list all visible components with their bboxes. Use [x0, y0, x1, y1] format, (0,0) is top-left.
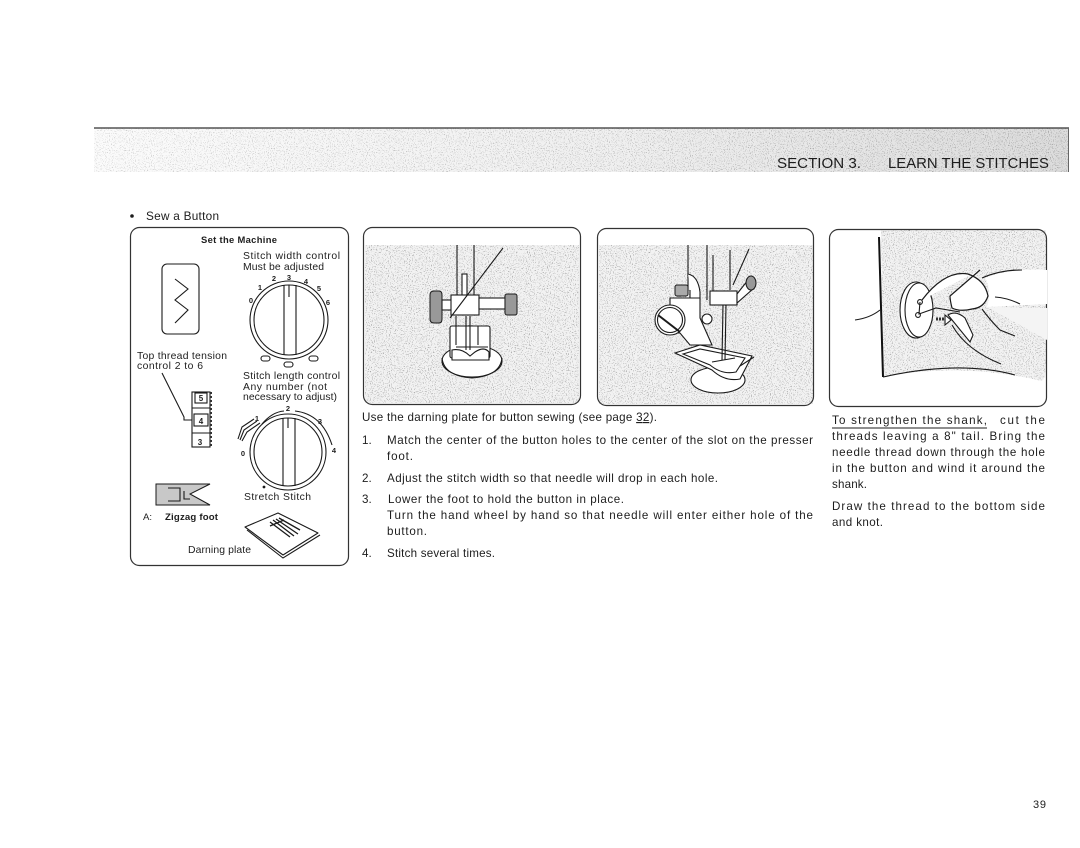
text block: strengthen the shank: To strengthen the shank, — [832, 414, 987, 427]
dial: stitch length — [238, 404, 337, 490]
label: stitch length control: necessary to adjust) — [243, 392, 337, 403]
section title — [777, 155, 1049, 172]
dial: stitch length: 3 — [318, 417, 322, 426]
step 4: Stitch several times. — [387, 547, 495, 560]
label: darning plate: Darning plate — [188, 545, 251, 556]
label: stitch length control: Any number (not — [243, 382, 327, 393]
label: stitch length control: Stitch length control — [243, 371, 340, 382]
page number: 39 — [1033, 799, 1046, 811]
label: zigzag foot — [143, 512, 219, 523]
icon: darning plate — [245, 513, 320, 558]
step 1 — [362, 434, 813, 463]
dial: stitch width: 3 — [287, 273, 291, 282]
step 1: Match the center of the button holes to the center of the slot on the presser — [387, 434, 813, 447]
label: stretch stitch: Stretch Stitch — [244, 492, 311, 503]
icon: zigzag stitch pattern — [162, 264, 199, 334]
panel: set the machine — [130, 228, 348, 566]
step 3: 3. — [362, 493, 372, 506]
step 3 — [362, 493, 813, 538]
label: zigzag foot: A: — [143, 512, 152, 523]
step 1: 1. — [362, 434, 372, 447]
section title: LEARN THE STITCHES — [888, 155, 1049, 172]
step 2: Adjust the stitch width so that needle will drop in each hole. — [387, 472, 718, 485]
dial: stitch width: 4 — [304, 277, 309, 286]
tension control diagram: 4 — [199, 417, 204, 426]
panel heading: Set the Machine — [201, 234, 277, 245]
dial: stitch width: 6 — [326, 298, 330, 307]
text block: strengthen the shank: threads leaving a 8" tail. Bring the — [832, 430, 1045, 443]
step 3: Turn the hand wheel by hand so that needle will enter either hole of the — [387, 509, 813, 522]
dial: stitch width — [249, 273, 330, 367]
dial: stitch length: 4 — [332, 446, 337, 455]
label: zigzag foot: Zigzag foot — [165, 512, 219, 523]
section header band — [94, 128, 1069, 172]
text block: strengthen the shank: Draw the thread to the bottom side — [832, 500, 1045, 513]
step 3: Lower the foot to hold the button in place. — [388, 493, 624, 506]
panel: front view of presser foot — [364, 228, 580, 404]
illustration: hand and button — [855, 237, 1047, 377]
intro line: Use the darning plate for button sewing (see page 32). — [362, 411, 657, 424]
dial: stitch length: 2 — [286, 404, 290, 413]
panel: winding thread around shank — [830, 230, 1047, 406]
tension control diagram: 5 — [199, 394, 204, 403]
tension control diagram: 3 — [198, 438, 203, 447]
heading: sew a button: Sew a Button — [146, 209, 219, 223]
illustration: foot angled — [655, 245, 756, 393]
illustration: foot front — [430, 245, 517, 378]
icon: zigzag foot — [156, 484, 210, 505]
label: stitch width control: Stitch width control — [243, 251, 340, 262]
label: top thread tension: control 2 to 6 — [137, 361, 203, 372]
label: top thread tension: Top thread tension — [137, 351, 227, 362]
tension control diagram — [162, 373, 211, 447]
step 1: foot. — [387, 450, 413, 463]
text block: strengthen the shank: shank. — [832, 478, 867, 491]
step 3: button. — [387, 525, 427, 538]
dial: stitch length: 1 — [255, 414, 259, 423]
text block: strengthen the shank: needle thread down through the hole — [832, 446, 1045, 459]
text block: strengthen the shank: in the button and wind it around the — [832, 462, 1045, 475]
panel: angled view of presser foot — [598, 228, 814, 406]
dial: stitch length: 0 — [241, 449, 245, 458]
dial: stitch width: 1 — [258, 283, 262, 292]
dial: stitch width: 5 — [317, 284, 321, 293]
text block: strengthen the shank: cut the — [1000, 414, 1045, 427]
section title: SECTION 3. — [777, 155, 861, 172]
text block: strengthen the shank: and knot. — [832, 516, 883, 529]
step 2: 2. — [362, 472, 372, 485]
text block: strengthen the shank — [832, 414, 1045, 529]
text block: darning plate instructions — [362, 411, 813, 560]
label: stitch width control: Must be adjusted — [243, 262, 324, 273]
dial: stitch width: 0 — [249, 296, 253, 305]
step 4: 4. — [362, 547, 372, 560]
dial: stitch width: 2 — [272, 274, 276, 283]
